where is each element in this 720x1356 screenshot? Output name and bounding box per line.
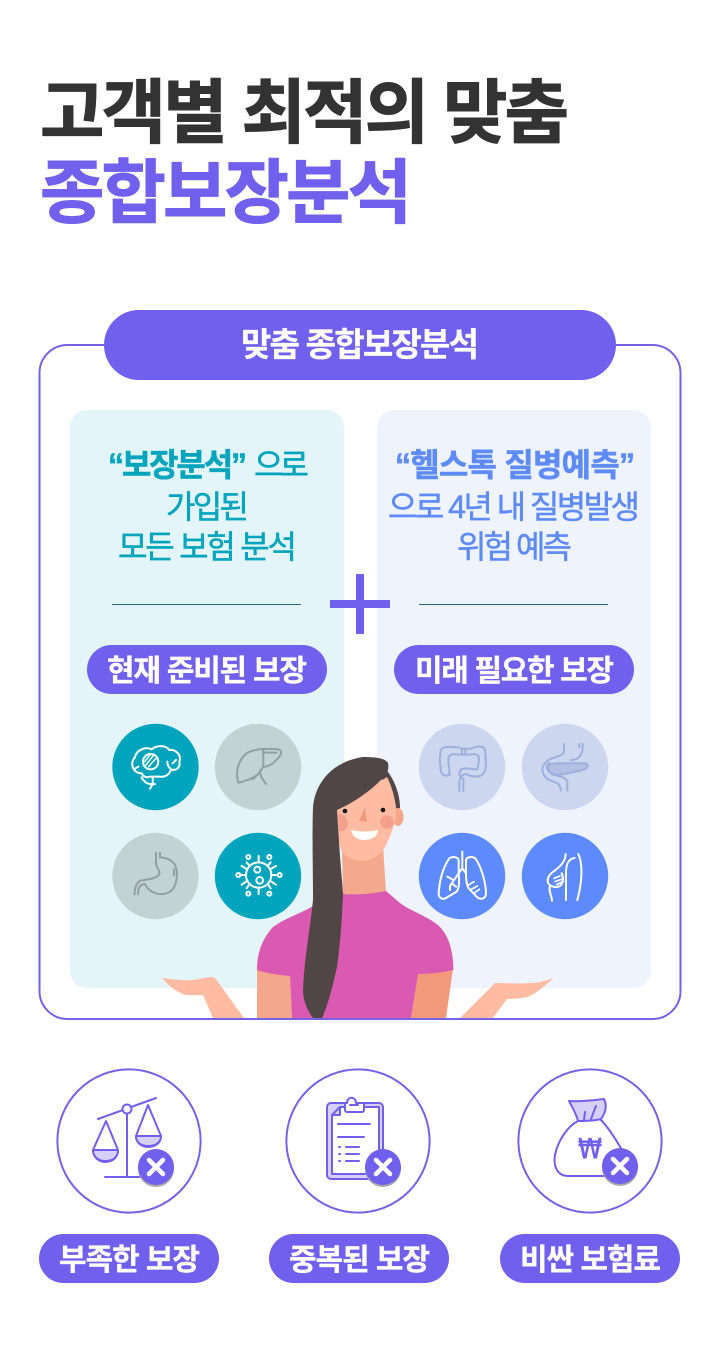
label: expensive premium xyxy=(500,1234,680,1283)
panel: future coverage background xyxy=(377,410,651,988)
icon: lungs xyxy=(419,833,505,919)
text block: coverage analysis: 모든 보험 분석 xyxy=(118,529,297,565)
right eye xyxy=(381,808,385,812)
title: 고객별 최적의 맞춤 xyxy=(40,74,569,152)
label: duplicate coverage xyxy=(269,1234,449,1283)
text block: health talk prediction: 위험 예측 xyxy=(457,529,572,565)
label: insufficient coverage xyxy=(39,1234,219,1283)
title: 종합보장분석 xyxy=(40,154,412,232)
label: future coverage: 미래 필요한 보장 xyxy=(415,655,614,688)
panel: outer frame xyxy=(40,345,680,1019)
face xyxy=(337,777,396,861)
icon: breast xyxy=(522,833,608,919)
icon: clipboard xyxy=(286,1069,430,1213)
label: current coverage xyxy=(87,645,327,694)
neck xyxy=(342,845,386,895)
left arm xyxy=(257,968,292,1018)
right cheek xyxy=(380,815,394,829)
item: expensive premium xyxy=(500,1069,680,1283)
item: insufficient coverage xyxy=(39,1069,219,1283)
ear xyxy=(392,808,404,826)
text block: health talk prediction: 으로 4년 내 질병발생 xyxy=(388,489,640,525)
illustration: woman shrugging xyxy=(162,757,553,1018)
icon: plus xyxy=(330,574,390,634)
label: expensive premium: 비싼 보험료 xyxy=(520,1244,661,1277)
right hand xyxy=(460,978,553,1018)
item: duplicate coverage xyxy=(269,1069,449,1283)
icon: pancreas xyxy=(522,724,608,810)
panel: current coverage background xyxy=(70,410,344,988)
nose xyxy=(359,807,367,822)
text block: health talk prediction xyxy=(388,447,640,565)
shirt xyxy=(257,891,454,1018)
text block: coverage analysis: 가입된 xyxy=(166,489,249,525)
header pill: 맞춤 종합보장분석 xyxy=(241,326,479,363)
hair xyxy=(303,757,388,1018)
label: current coverage: 현재 준비된 보장 xyxy=(107,655,307,688)
label: future coverage xyxy=(394,645,634,694)
icon: virus xyxy=(215,833,301,919)
label: duplicate coverage: 중복된 보장 xyxy=(289,1244,430,1277)
smile xyxy=(351,830,378,840)
label: insufficient coverage: 부족한 보장 xyxy=(59,1244,200,1277)
text block: health talk prediction: “헬스톡 질병예측” xyxy=(395,447,635,483)
text block: coverage analysis: “보장분석” xyxy=(108,447,247,483)
left hand xyxy=(162,977,244,1018)
header pill xyxy=(104,310,616,380)
text block: coverage analysis: 으로 xyxy=(254,447,309,483)
icon: stomach xyxy=(112,833,199,919)
icon: money bag xyxy=(518,1069,662,1213)
text block: coverage analysis xyxy=(108,447,309,565)
icon: colon xyxy=(419,724,505,810)
icon: money bag: ₩ xyxy=(578,1132,602,1165)
title xyxy=(40,74,569,232)
icon: liver xyxy=(215,724,301,810)
icon: scale xyxy=(57,1069,201,1213)
hair back xyxy=(380,768,400,812)
right arm xyxy=(411,968,453,1018)
icon: brain xyxy=(112,724,199,810)
left eye xyxy=(343,809,347,813)
left cheek xyxy=(338,814,348,831)
